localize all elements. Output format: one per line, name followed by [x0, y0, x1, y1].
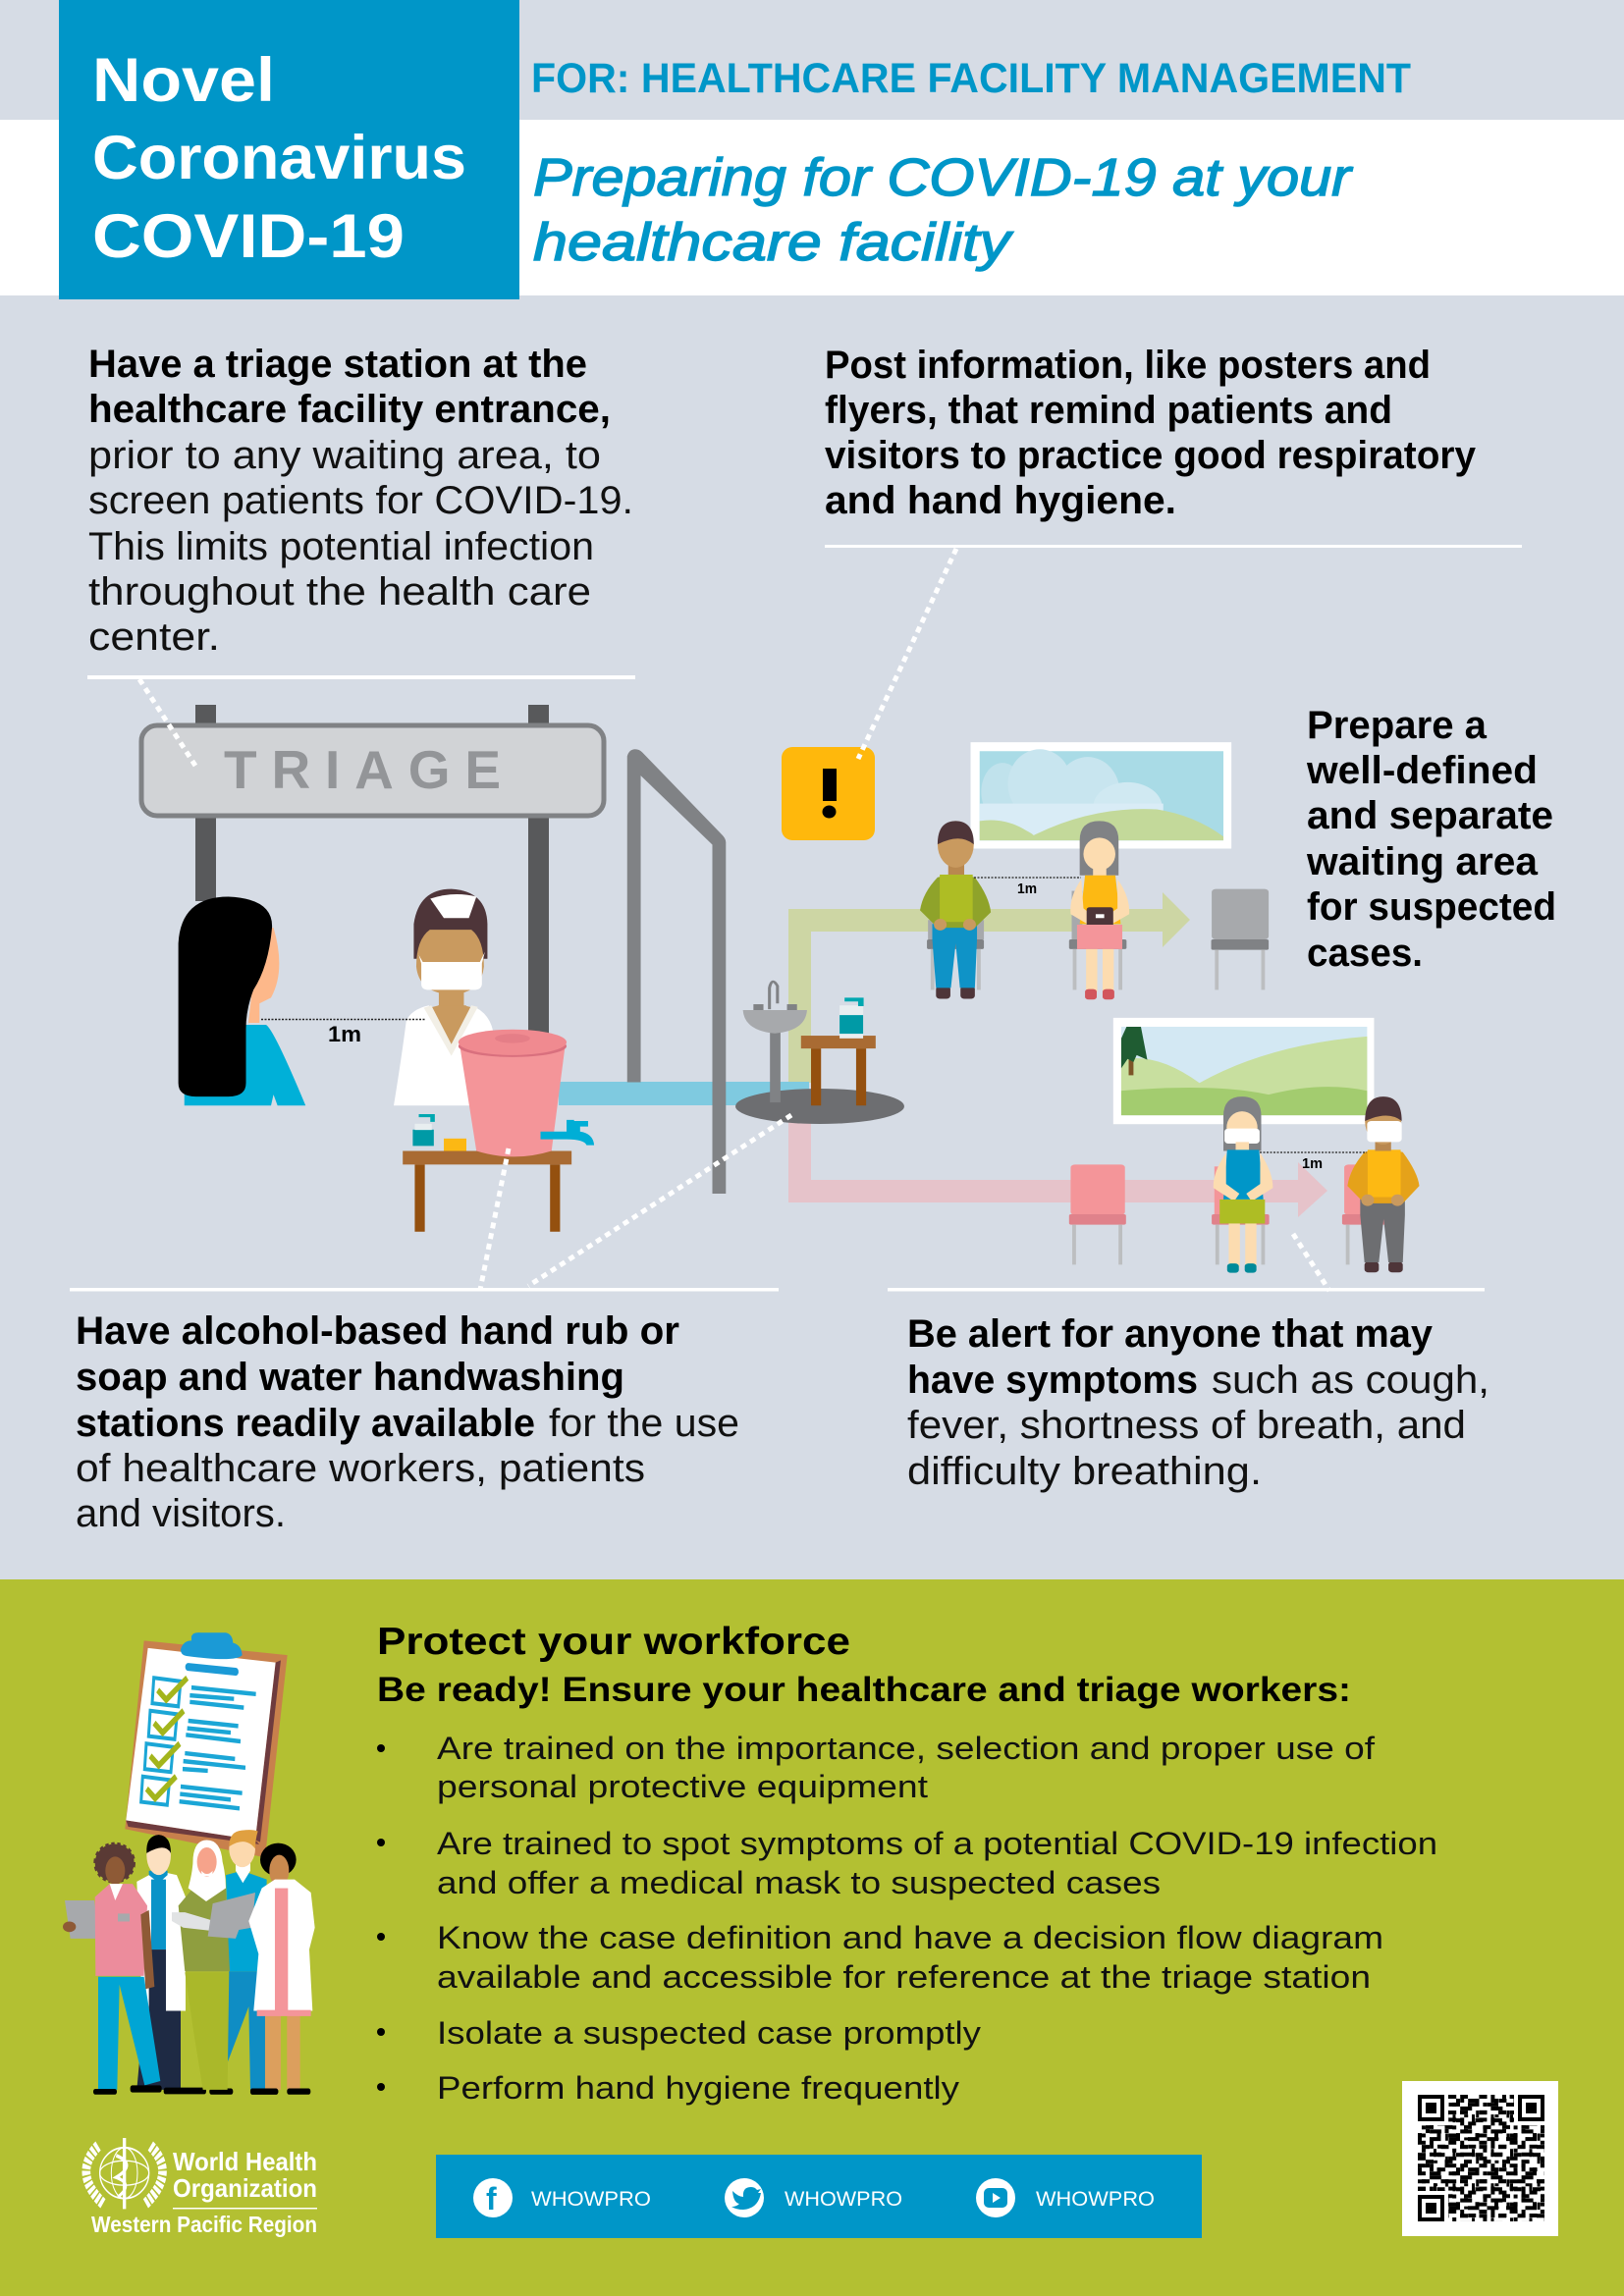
text block: posters: flyers, that remind patients and [825, 389, 1392, 432]
woman in headscarf [172, 1840, 231, 2090]
text block: handwashing [76, 1309, 739, 1535]
WHO emblem [86, 2138, 163, 2209]
nurse in blue scrubs [202, 1830, 278, 2095]
text block: handwashing: Have alcohol-based hand rub or [76, 1309, 679, 1353]
soap [444, 1139, 466, 1151]
text block: handwashing: stations readily available [76, 1402, 535, 1445]
masked woman seated, blue top [1212, 1096, 1272, 1273]
doctor in white coat [248, 1843, 315, 2095]
text block: waiting area: for suspected [1307, 885, 1556, 929]
window: green hills [1113, 1018, 1374, 1124]
text block: symptoms: difficulty breathing. [907, 1450, 1262, 1493]
floor strip [559, 1082, 809, 1105]
social media bar: WHOWPRO [785, 2188, 902, 2211]
doorway frame [627, 749, 726, 1194]
hand rub bottle [839, 997, 864, 1039]
sink [743, 982, 807, 1102]
social media bar: WHOWPRO [531, 2188, 651, 2211]
bullet list: Are trained on the importance, selection and proper use of [437, 1731, 1375, 1766]
window: clouds and hills [971, 742, 1231, 848]
small table [801, 1036, 876, 1105]
waiting area scene [920, 742, 1420, 1273]
title box [59, 0, 519, 299]
text block: handwashing: soap and water handwashing [76, 1356, 624, 1399]
text block: waiting area: Prepare a [1307, 704, 1488, 747]
triage scene [141, 705, 809, 1232]
text block: posters [825, 344, 1477, 522]
text block: triage station: healthcare facility entrance, [88, 388, 611, 431]
distance marker: waiting area two: 1m [1302, 1155, 1323, 1172]
subtitle: healthcare facility [533, 213, 1013, 272]
icon: facebook: f [486, 2181, 497, 2216]
clipboard [125, 1632, 288, 1857]
text block: triage station: center. [88, 615, 220, 659]
doctor in blue shirt [136, 1835, 206, 2094]
social media bar: WHOWPRO [1036, 2188, 1155, 2211]
text block: triage station: Have a triage station at the [88, 343, 587, 386]
text block: handwashing: of healthcare workers, patients [76, 1447, 645, 1490]
text block: symptoms: have symptoms [907, 1359, 1198, 1402]
icon: facebook [473, 2178, 513, 2217]
title box: Coronavirus [92, 124, 466, 192]
subtitle [533, 148, 1353, 272]
bullet list: and offer a medical mask to suspected cases [437, 1865, 1161, 1900]
masked man seated, yellow top [1342, 1096, 1420, 1272]
text block: waiting area: and separate [1307, 794, 1553, 837]
text block: symptoms: Be alert for anyone that may [907, 1312, 1434, 1356]
flow arrows: green and pink paths [788, 892, 1327, 1217]
triage sign [141, 725, 604, 816]
text block: triage station: This limits potential infection [88, 525, 594, 568]
workforce heading [377, 1621, 1351, 1709]
man seated, green top [920, 821, 991, 999]
header white band [0, 120, 1624, 295]
empty pink chair [1069, 1164, 1126, 1264]
patient figure [179, 897, 305, 1105]
title box: COVID-19 [92, 202, 405, 271]
WHO logo text: Organization [173, 2173, 317, 2203]
distance marker: waiting area one [974, 878, 1081, 897]
water bucket station [403, 1030, 594, 1232]
distance marker: waiting area one: 1m [1017, 881, 1037, 897]
WHO logo text [91, 2147, 317, 2237]
woman seated, yellow top [1069, 821, 1129, 999]
tap [541, 1120, 594, 1146]
distance marker: triage: 1m [328, 1022, 361, 1046]
hand rub bottle [412, 1114, 435, 1146]
text block: triage station: screen patients for COVID-19. [88, 479, 633, 522]
bullet list: Are trained to spot symptoms of a potential COVID-19 infection [437, 1826, 1437, 1861]
workforce heading: Be ready! Ensure your healthcare and triage workers: [377, 1671, 1351, 1709]
bucket [459, 1030, 567, 1156]
icon: youtube [976, 2178, 1015, 2217]
triage sign: TRIAGE [224, 739, 501, 800]
text block: triage station: prior to any waiting area, to [88, 434, 601, 477]
dotted callout leaders [139, 549, 1329, 1291]
text block: symptoms: fever, shortness of breath, and [907, 1404, 1466, 1447]
sign posts [195, 705, 549, 1039]
title box: Novel [92, 46, 275, 115]
social media bar [436, 2155, 1202, 2238]
text block: posters: and hand hygiene. [825, 479, 1176, 522]
tablet, shared [208, 1893, 255, 1939]
text block: handwashing: for the use [549, 1402, 739, 1445]
bullet list: Know the case definition and have a decision flow diagram [437, 1920, 1383, 1955]
table [403, 1151, 571, 1232]
WHO logo text: Western Pacific Region [91, 2212, 317, 2237]
handwash station [735, 982, 904, 1124]
text block: posters: Post information, like posters and [825, 344, 1431, 387]
warning poster icon [782, 747, 875, 840]
bullet list: Perform hand hygiene frequently [437, 2070, 959, 2106]
icon: twitter [725, 2178, 764, 2217]
text block: triage station [88, 343, 633, 659]
nurse figure [394, 889, 499, 1105]
text block: waiting area: well-defined [1306, 749, 1538, 792]
bullet list: available and accessible for reference at the triage station [437, 1959, 1371, 1995]
text block: symptoms: such as cough, [1212, 1359, 1489, 1402]
worker in pink scrubs [63, 1843, 162, 2095]
text block: posters: visitors to practice good respiratory [825, 434, 1477, 477]
WHO logo text: World Health [173, 2147, 317, 2176]
bullet list: personal protective equipment [437, 1769, 928, 1804]
illustration: clipboard and health workers [63, 1632, 315, 2209]
distance marker: waiting area two [1260, 1152, 1367, 1172]
empty grey chair [1212, 889, 1269, 989]
text block: triage station: throughout the health care [88, 570, 591, 614]
bullet list [377, 1731, 1437, 2106]
text block: handwashing: and visitors. [76, 1492, 286, 1535]
text block: symptoms [907, 1312, 1489, 1493]
subtitle: Preparing for COVID-19 at your [533, 148, 1353, 207]
QR code [1402, 2081, 1558, 2236]
workforce heading: Protect your workforce [377, 1621, 850, 1663]
text block: waiting area [1306, 704, 1556, 975]
text block: waiting area: waiting area [1306, 840, 1539, 883]
panel: protect your workforce [0, 1579, 1624, 2296]
bullet list: Isolate a suspected case promptly [437, 2015, 981, 2051]
text block: waiting area: cases. [1307, 932, 1423, 975]
audience heading: FOR: HEALTHCARE FACILITY MANAGEMENT [531, 55, 1411, 102]
